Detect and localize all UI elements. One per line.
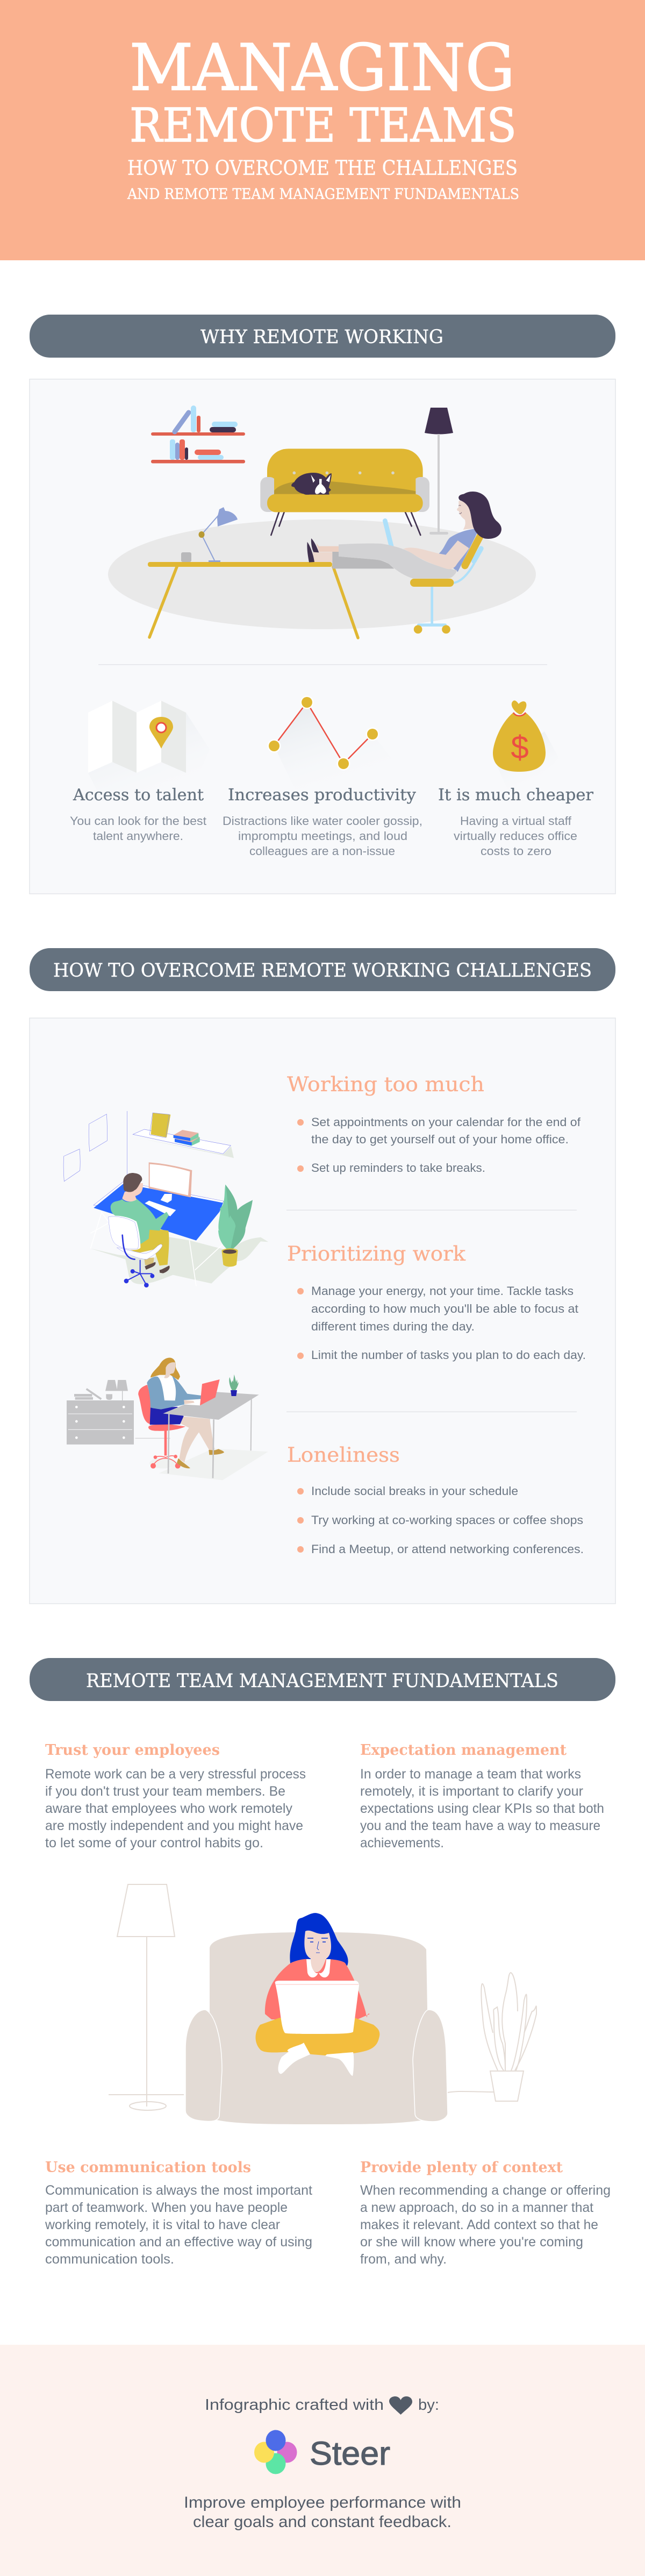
item: increases productivity: impromptu meetings, and loud (238, 829, 407, 843)
section heading: why remote working (30, 315, 615, 358)
monitor (149, 1162, 192, 1203)
dog (291, 473, 332, 495)
floor lamp (425, 408, 453, 535)
credit line (205, 2396, 439, 2414)
block: working too much: Set appointments on your calendar for the end of (311, 1115, 581, 1129)
block: trust your employees: to let some of your control habits go. (45, 1835, 263, 1851)
item: it is much cheaper (438, 701, 594, 858)
block: provide plenty of context (360, 2159, 611, 2267)
block: prioritizing work: Limit the number of tasks you plan to do each day. (311, 1348, 586, 1362)
block: expectation management: remotely, it is important to clarify your (360, 1784, 583, 1799)
block: prioritizing work: Prioritizing work (287, 1242, 466, 1265)
header banner (0, 0, 645, 260)
shelf (133, 1113, 234, 1158)
item: increases productivity: Increases productivity (228, 786, 416, 805)
plant outline (448, 1973, 536, 2101)
frames (63, 1111, 127, 1182)
office chair (109, 1216, 162, 1287)
block: prioritizing work: according to how much you'll be able to focus at (311, 1302, 579, 1315)
subtitle: HOW TO OVERCOME THE CHALLENGES (127, 156, 518, 180)
block: use communication tools: Communication is always the most important (45, 2183, 312, 2198)
block: provide plenty of context: a new approach, do so in a manner that (360, 2200, 593, 2215)
panel: challenges (30, 1018, 615, 1604)
block: prioritizing work: Manage your energy, not your time. Tackle tasks (311, 1284, 574, 1298)
illustration: woman at desk (67, 1358, 268, 1480)
desk lamp (199, 507, 238, 562)
item: it is much cheaper: Having a virtual staff (460, 814, 572, 828)
block: loneliness: Find a Meetup, or attend networking conferences. (311, 1542, 584, 1556)
laptop (200, 1379, 220, 1405)
illustration: woman working from home (108, 405, 536, 638)
floor (159, 1448, 268, 1480)
block: trust your employees: if you don't trust your team members. Be (45, 1784, 285, 1799)
logo: steer (254, 2430, 390, 2474)
icon: map with pin (88, 701, 210, 807)
block: working too much (287, 1073, 581, 1175)
block: use communication tools: communication and an effective way of using (45, 2235, 312, 2250)
block: loneliness: Loneliness (287, 1443, 400, 1467)
desk back legs (209, 1419, 211, 1436)
block: provide plenty of context: makes it relevant. Add context so that he (360, 2217, 598, 2232)
title: REMOTE TEAMS (130, 99, 517, 153)
woman in chair (307, 492, 501, 634)
illustration: man at desk (63, 1111, 268, 1287)
credit line: Infographic crafted with (205, 2396, 384, 2414)
panel: why remote working (30, 379, 615, 894)
icon: heart (389, 2396, 412, 2415)
item: increases productivity: Distractions like water cooler gossip, (223, 814, 422, 828)
block: trust your employees: Remote work can be a very stressful process (45, 1767, 306, 1782)
block: expectation management: achievements. (360, 1835, 444, 1851)
section heading: why remote working: WHY REMOTE WORKING (200, 326, 443, 348)
sofa (260, 449, 429, 535)
item: increases productivity: colleagues are a non-issue (249, 844, 395, 858)
block: loneliness (287, 1443, 584, 1556)
item: increases productivity (223, 696, 422, 858)
desk (90, 1182, 224, 1286)
man (111, 1173, 170, 1273)
item: access to talent (70, 701, 210, 843)
block: use communication tools (45, 2159, 312, 2267)
block: provide plenty of context: or she will know where you're coming (360, 2235, 583, 2250)
block: expectation management (360, 1742, 604, 1851)
floor lamp outline (109, 1884, 184, 2110)
plant (218, 1185, 253, 1266)
woman (147, 1358, 224, 1468)
desk (163, 1392, 259, 1478)
section heading: how to overcome (30, 948, 615, 991)
block: expectation management: expectations using clear KPIs so that both (360, 1801, 604, 1816)
block: use communication tools: Use communication tools (45, 2159, 251, 2176)
keyboard (145, 1201, 176, 1216)
block: use communication tools: working remotely, it is vital to have clear (45, 2217, 280, 2232)
block: use communication tools: part of teamwork. When you have people (45, 2200, 288, 2215)
credit line: by: (418, 2396, 439, 2414)
icon: money bag (493, 701, 559, 791)
block: working too much: the day to get yourself out of your home office. (311, 1133, 569, 1146)
divider (98, 664, 547, 665)
block: trust your employees: aware that employees who work remotely (45, 1801, 292, 1816)
logo: steer: Steer (310, 2435, 390, 2472)
armchair (185, 1932, 448, 2124)
icon: money bag: $ (511, 729, 529, 765)
plant (229, 1375, 239, 1396)
tagline: Improve employee performance with (184, 2494, 461, 2511)
block: expectation management: you and the team have a way to measure (360, 1818, 600, 1833)
block: provide plenty of context: from, and why. (360, 2252, 447, 2267)
rug (108, 520, 536, 629)
block: working too much: Working too much (287, 1073, 484, 1096)
woman with laptop (255, 1913, 379, 2076)
block: loneliness: Include social breaks in your schedule (311, 1484, 518, 1498)
section heading: fundamentals: REMOTE TEAM MANAGEMENT FUNDAMENTALS (86, 1670, 558, 1692)
block: trust your employees (45, 1742, 306, 1851)
item: access to talent: talent anywhere. (93, 829, 183, 843)
item: it is much cheaper: costs to zero (481, 844, 551, 858)
block: expectation management: Expectation management (360, 1742, 567, 1759)
desk (148, 552, 358, 638)
chair (138, 1385, 185, 1469)
block: expectation management: In order to manage a team that works (360, 1767, 581, 1782)
section heading: how to overcome: HOW TO OVERCOME REMOTE WORKING CHALLENGES (53, 960, 592, 981)
block: loneliness: Try working at co-working spaces or coffee shops (311, 1513, 583, 1527)
item: access to talent: Access to talent (73, 786, 204, 805)
tagline: clear goals and constant feedback. (193, 2513, 452, 2531)
footer (0, 2345, 645, 2576)
block: provide plenty of context: Provide plenty of context (360, 2159, 563, 2176)
item: it is much cheaper: virtually reduces office (454, 829, 577, 843)
bookshelves (151, 405, 245, 464)
section heading: fundamentals (30, 1658, 615, 1701)
block: use communication tools: communication tools. (45, 2252, 174, 2267)
item: it is much cheaper: It is much cheaper (438, 786, 594, 805)
block: prioritizing work: different times during the day. (311, 1320, 475, 1333)
floor shadow (91, 1237, 268, 1284)
title: MANAGING (130, 31, 515, 105)
block: trust your employees: are mostly independent and you might have (45, 1818, 303, 1833)
subtitle (127, 156, 519, 203)
subtitle: AND REMOTE TEAM MANAGEMENT FUNDAMENTALS (127, 186, 519, 203)
title (130, 31, 517, 153)
item: access to talent: You can look for the best (70, 814, 206, 828)
divider (286, 1411, 577, 1412)
block: provide plenty of context: When recommending a change or offering (360, 2183, 611, 2198)
dresser (67, 1380, 170, 1444)
tagline (184, 2494, 461, 2531)
block: trust your employees: Trust your employees (45, 1742, 220, 1759)
block: working too much: Set up reminders to take breaks. (311, 1161, 485, 1175)
icon: line chart (268, 696, 408, 791)
divider (286, 1210, 577, 1211)
block: prioritizing work (287, 1242, 586, 1362)
illustration: woman on armchair (109, 1884, 536, 2124)
